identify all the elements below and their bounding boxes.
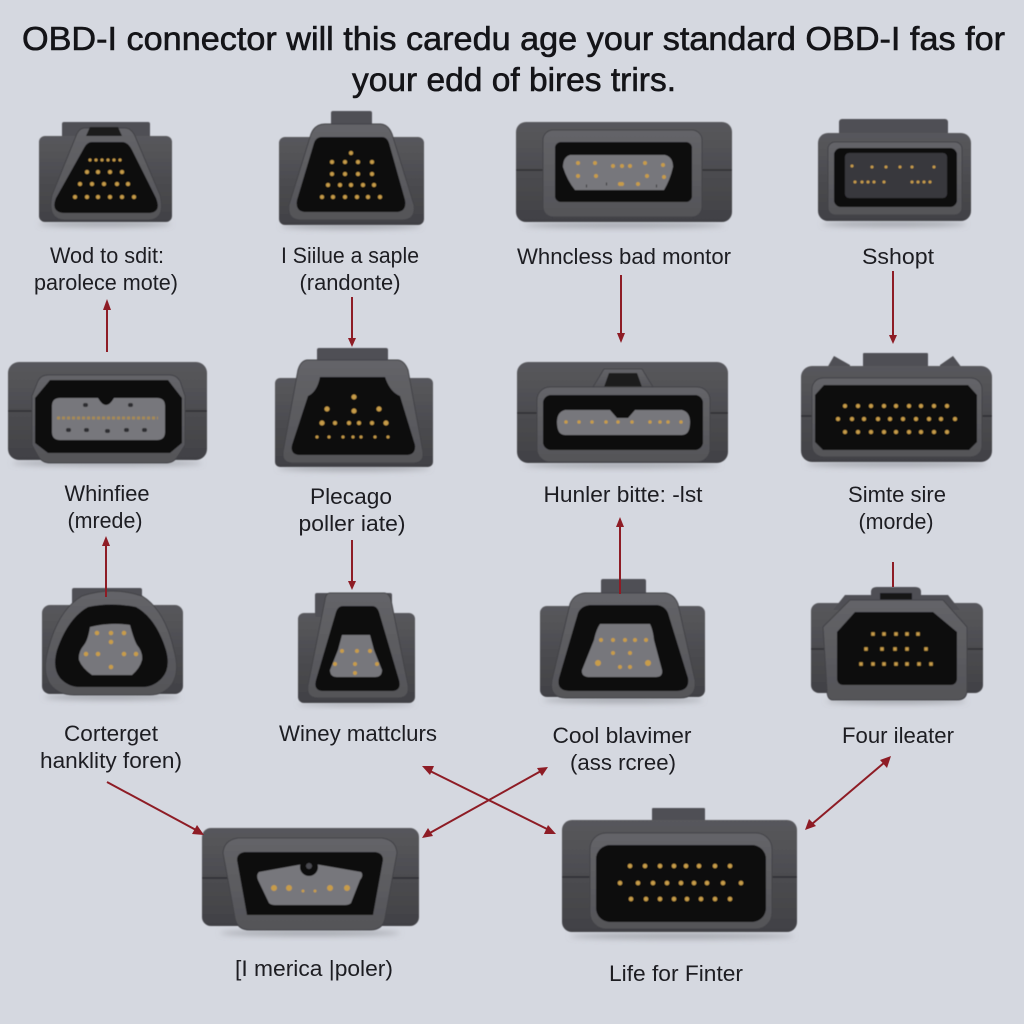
connector 1: Wod to sdit [39, 122, 172, 227]
title: OBD-I connector will this caredu age your standard OBD-I fas for [22, 20, 1005, 57]
connector 11: Cool blavimer [540, 579, 705, 703]
arrow: connector 9 up to label [102, 536, 110, 597]
label: Four ileater: Four ileater [842, 723, 954, 748]
connector 12: Four ileater [811, 587, 983, 704]
connector 14: Life for Finter [562, 808, 797, 939]
label: I Sillue a saple: (randonte) [300, 270, 400, 295]
label: Whinfiee [64, 481, 150, 533]
label: Sshopt: Sshopt [862, 244, 934, 269]
connector 6: Plecago [275, 348, 433, 471]
label: I Sillue a saple [281, 243, 419, 295]
label: Whinfiee: Whinfiee [64, 481, 150, 506]
label: Simte sire: Simte sire [848, 482, 946, 507]
connector 9: Corterget [42, 588, 183, 700]
label: Simte sire: (morde) [858, 509, 934, 534]
label: Cool blavimer: Cool blavimer [552, 723, 692, 748]
arrow: label down to connector 8 [889, 271, 897, 344]
arrow: double-headed, connector 14 to label [422, 766, 556, 834]
label: Corterget: hanklity foren) [40, 748, 182, 773]
label: Whncless bad montor: Whncless bad montor [517, 244, 731, 269]
connector 7: Hunler bitte [517, 362, 728, 468]
label: Simte sire [848, 482, 946, 534]
label: Wod to sdit: parolece mote) [34, 270, 178, 295]
connector 4: Sshopt [818, 119, 971, 227]
label: I Sillue a saple: I Siilue a saple [281, 243, 419, 268]
connector 8: Simte sire [801, 353, 992, 467]
title: your edd of bires trirs. [352, 61, 676, 98]
label: Cool blavimer [552, 723, 692, 775]
label: Corterget [40, 721, 182, 773]
label: Plecago [298, 484, 406, 536]
connector 13: I merica poler [202, 828, 419, 936]
connector 3: Whncless bad montor [516, 122, 732, 228]
label: Winey mattclurs: Winey mattclurs [279, 721, 437, 746]
arrow: double-headed, connector 14 to Four ileater [805, 756, 891, 830]
label: Cool blavimer: (ass rcree) [570, 750, 676, 775]
title [22, 20, 1005, 98]
arrow: label down to connector 10 [348, 540, 356, 590]
label: Whinfiee: (mrede) [68, 508, 142, 533]
label: Plecago: Plecago [310, 484, 392, 509]
label: Plecago: poller iate) [298, 511, 406, 536]
label: I merica poler: [I merica |poler) [235, 956, 393, 981]
label: Wod to sdit [34, 243, 178, 295]
connector 2: I Sillue a saple [279, 111, 424, 229]
label: Hunler bitte: Hunler bitte: -lst [544, 482, 702, 507]
arrow: label down to connector 6 [348, 297, 356, 347]
label: Corterget: Corterget [64, 721, 158, 746]
connector 5: Whinfiee [8, 362, 207, 466]
arrow: label to connector 13 [107, 782, 204, 835]
connector 10: Winey mattclurs [298, 593, 415, 706]
arrow: short tick above connector 12 [892, 562, 894, 587]
label: Wod to sdit: Wod to sdit: [50, 243, 164, 268]
arrow: double-headed, connector 13 to label [422, 767, 548, 838]
arrow: connector 5 up to label [103, 299, 111, 352]
arrow: label down to connector 7 [617, 275, 625, 343]
label: Life for Finter: Life for Finter [609, 961, 743, 986]
arrow: connector 11 up to label [616, 517, 624, 594]
